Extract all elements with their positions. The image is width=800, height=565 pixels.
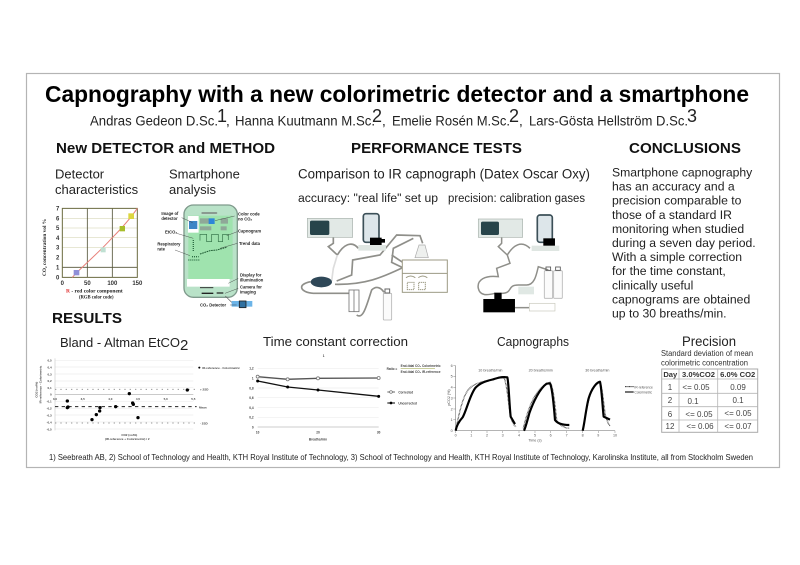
data points: [66, 388, 189, 421]
chart: Bland-Altman: -0,3: [47, 413, 52, 417]
uncorrected line: [256, 379, 380, 398]
chart: Bland-Altman: -0,2: [47, 406, 52, 410]
chart: capnographs: 4: [518, 434, 520, 438]
monitor: [307, 218, 353, 237]
chart: detector calibration curve: 5: [56, 226, 60, 232]
chart: Bland-Altman: -0,5: [47, 427, 52, 431]
chart: capnographs: 2: [451, 407, 453, 411]
label: accuracy setup: accuracy: "real life" set up: [298, 193, 438, 205]
chart: time constant correction: 0: [252, 425, 254, 429]
detector image: [188, 216, 199, 233]
gas cylinders: [544, 267, 562, 298]
callout labels: CO₂ Detector: [200, 302, 226, 307]
label: precision setup: precision: calibration gases: [448, 193, 585, 205]
chart: capnographs: 8: [582, 434, 584, 438]
heading: capnographs: Capnographs: [497, 335, 569, 349]
chart: Bland-Altman: IR-reference - Colorimetric: [39, 365, 43, 403]
chart: detector calibration curve: CO₂ concentration vol %: [42, 219, 48, 276]
chart: time constant correction: 0,4: [249, 406, 254, 410]
chart: time constant correction: 20: [316, 430, 320, 434]
authors: Emelie Rosén M.Sc.: [392, 114, 510, 128]
chart: time constant correction: [249, 354, 441, 442]
chart: Bland-Altman: 0,3: [48, 372, 52, 376]
legend: capnographs: IR-reference: [634, 385, 653, 389]
chart: capnographs: 3: [451, 396, 453, 400]
gas analyser box: [402, 260, 447, 292]
subheading: detector characteristics: characteristics: [55, 182, 139, 197]
callout labels: [157, 211, 264, 307]
callout labels: EtCO₂: [165, 229, 177, 234]
subheading: smartphone analysis: Smartphone: [169, 166, 240, 182]
chart: detector calibration curve: 6: [56, 216, 60, 222]
chart: detector calibration curve: 150: [132, 281, 143, 287]
precision table: <= 0.05: [724, 409, 752, 418]
precision table: 0.09: [730, 383, 746, 392]
chart: detector calibration curve: (RGB color code): [79, 296, 114, 301]
precision table: <= 0.05: [682, 383, 710, 392]
colorimetric traces: [456, 377, 610, 431]
chart: Bland-Altman: 3,5: [81, 397, 85, 401]
legend: Uncorrected: [398, 401, 417, 405]
chart: detector calibration curve: 50: [84, 281, 91, 287]
callout labels: illumination: [240, 277, 264, 282]
chart: detector calibration curve: [42, 206, 143, 301]
heading: performance tests: PERFORMANCE TESTS: [351, 141, 522, 157]
chart: capnographs: 3: [502, 434, 504, 438]
chart: Bland-Altman: 4,5: [136, 397, 140, 401]
EtCO2 and respiratory bars: [188, 240, 199, 260]
IR reference traces: [456, 377, 610, 431]
precision table: Day: [663, 370, 678, 379]
chart: Bland-Altman: 4,0: [108, 397, 113, 401]
chart: capnographs: 5: [451, 375, 453, 379]
colour code box: [200, 218, 228, 230]
chart: Bland-Altman: CO2 (vol%): [35, 382, 39, 398]
authors: Hanna Kuutmann M.Sc.: [235, 114, 375, 128]
chart: Bland-Altman: 0,1: [48, 386, 52, 390]
poster frame: [26, 74, 780, 468]
chart: Bland-Altman: -0,1: [47, 400, 52, 404]
diagram: calibration gases set up: [478, 215, 562, 312]
chart: Bland-Altman: 5,5: [191, 397, 196, 401]
callout labels: rate: [157, 247, 166, 252]
conclusions text: precision comparable to: [612, 194, 742, 208]
black chamber: [483, 293, 515, 312]
pointer lines: [175, 216, 238, 305]
colour square: yellow: [128, 213, 134, 219]
chart: capnographs: 4: [451, 386, 453, 390]
chart: capnographs: Time (s): [528, 439, 542, 443]
chart: time constant correction: 30: [377, 430, 381, 434]
legend: capnographs: Colorimetric: [634, 391, 652, 395]
callout labels: no CO₂: [238, 216, 252, 221]
conclusions text: With a simple correction: [612, 250, 742, 264]
chart: detector calibration curve: 4: [56, 236, 60, 242]
CO2 detector: [225, 296, 252, 308]
diagram: real life set up: [302, 214, 447, 320]
precision table: 1: [668, 383, 673, 392]
colour square: yellow-green: [120, 226, 125, 231]
conclusions text: up to 30 breaths/min.: [612, 306, 726, 320]
callout labels: Trend data: [239, 241, 261, 246]
conclusions text: has an accuracy and a: [612, 180, 735, 194]
chart: capnographs: pCO2 (%): [447, 389, 451, 406]
chart: Bland-Altman: 5,0: [164, 397, 168, 401]
chart: capnographs: 9: [597, 434, 599, 438]
capnogram trace: [200, 234, 228, 242]
chart: time constant correction: 10: [256, 430, 260, 434]
chart: detector calibration curve: 0: [61, 281, 65, 287]
authors: [90, 106, 697, 128]
trend trace: [200, 247, 227, 254]
chart: Bland-Altman: 0,5: [48, 358, 52, 362]
precision table: 6.0% CO2: [720, 370, 755, 379]
chart: Bland-Altman: CO2 (vol%): [121, 433, 137, 437]
precision table: <= 0.06: [686, 422, 714, 431]
precision table: 2: [668, 396, 673, 405]
legend: [387, 364, 441, 405]
callout labels: imaging: [240, 290, 256, 295]
chart: Bland-Altman: 0,2: [48, 379, 52, 383]
small meter: [518, 287, 534, 294]
conclusions text: for the time constant,: [612, 264, 726, 278]
chart: time constant correction: 1: [252, 377, 254, 381]
authors: ,: [519, 114, 523, 128]
precision table: 12: [666, 422, 675, 431]
precision table: <= 0.07: [724, 422, 752, 431]
smartphone with clip: [358, 214, 386, 251]
legend: End-tidal CO₂ Colorimetric: [401, 364, 441, 368]
callout labels: Camera for: [240, 284, 262, 289]
chart: Bland-Altman: + 2SD: [200, 388, 209, 392]
table caption: Standard deviation of mean: [661, 349, 753, 358]
chart: Bland-Altman: (IR-reference + Colorimetric) / 2: [105, 437, 150, 441]
precision table: <= 0.05: [685, 410, 713, 419]
colour square: pale green: [101, 247, 106, 252]
chart: capnographs: 1: [451, 418, 453, 422]
recorder: [529, 303, 555, 311]
precision table: [662, 369, 758, 432]
phone display: [188, 216, 233, 279]
heading: time constant correction: Time constant correction: [263, 335, 408, 349]
chart: time constant correction: 0,8: [249, 386, 254, 390]
phone body: [184, 205, 237, 297]
chart: detector calibration curve: 7: [56, 206, 60, 212]
chart: Bland-Altman: Mean: [199, 405, 207, 409]
heading: new detector and method: New DETECTOR and METHOD: [56, 141, 275, 157]
chart: Bland-Altman: 0: [50, 393, 52, 397]
chart: Bland-Altman: -0,4: [47, 420, 52, 424]
chart: capnographs: 6: [451, 364, 453, 368]
precision table: 0.1: [687, 397, 699, 406]
callout labels: detector: [161, 216, 178, 221]
conclusions text: those of a standard IR: [612, 208, 732, 222]
chart: time constant correction: 1,2: [249, 367, 254, 371]
chart: capnographs: 7: [566, 434, 568, 438]
chart: detector calibration curve: 0: [56, 275, 60, 281]
chart: capnographs: 0: [455, 434, 457, 438]
smartphone analysis diagram: [157, 205, 264, 308]
smartphone with clip: [532, 215, 559, 251]
chart: time constant correction: Breaths/min: [309, 438, 327, 442]
precision table: 3.0%CO2: [682, 370, 715, 379]
chart: detector calibration curve: 100: [107, 281, 118, 287]
chart: detector calibration curve: 1: [56, 265, 60, 271]
chart: capnographs: [447, 364, 617, 443]
chart: time constant correction: 1: [323, 354, 325, 358]
chart: capnographs: 2: [486, 434, 488, 438]
monitor: [478, 219, 523, 237]
chart: capnographs: 5: [534, 434, 536, 438]
callout labels: Respiratory: [157, 242, 181, 247]
chart: capnographs: 10: [613, 434, 617, 438]
chart: time constant correction: 0,6: [249, 396, 254, 400]
precision table: 0.1: [732, 396, 744, 405]
legend: Corrected: [398, 390, 413, 394]
heading: results: RESULTS: [52, 311, 122, 327]
corrected line: [256, 375, 380, 381]
chart: capnographs: 10 breaths/min: [478, 369, 502, 373]
precision table: 6: [668, 410, 673, 419]
chart: Bland-Altman: 0,4: [48, 365, 52, 369]
authors: Andras Gedeon D.Sc.: [90, 114, 218, 128]
subheading: comparison: Comparison to IR capnograph (Datex Oscar Oxy): [298, 166, 590, 182]
callout labels: Image of: [161, 211, 179, 216]
flow meter: [349, 290, 359, 312]
heading: precision: Precision: [682, 334, 736, 349]
chart: capnographs: 0: [451, 429, 453, 433]
subheading: detector characteristics: Detector: [55, 166, 105, 182]
authors: Lars-Gösta Hellström D.Sc.: [529, 114, 688, 128]
chart: time constant correction: 0,2: [249, 416, 254, 420]
title: Capnography with a new colorimetric detector and a smartphone: [45, 81, 749, 107]
chart: capnographs: 6: [550, 434, 552, 438]
conclusions text: monitoring when studied: [612, 222, 744, 236]
chart: Bland-Altman: [35, 358, 240, 441]
gas cylinder: [383, 289, 392, 320]
flask: [415, 245, 428, 258]
legend: End-tidal CO₂ IR-reference: [401, 370, 441, 374]
callout labels: Capnogram: [238, 229, 261, 234]
callout labels: Display for: [240, 272, 262, 277]
chart: capnographs: 20 breaths/min: [529, 369, 553, 373]
callout labels: Color code: [238, 211, 260, 216]
authors: ,: [226, 114, 230, 128]
heading: Bland-Altman: Bland - Altman EtCO: [60, 335, 180, 350]
legend: Ratio =: [387, 367, 397, 371]
chart: Bland-Altman: IR-reference - Colorimetric: [202, 366, 240, 370]
authors: 2: [509, 106, 519, 126]
chart: detector calibration curve: R - red color component: [66, 289, 123, 295]
heading: Bland-Altman: 2: [180, 337, 188, 354]
chart: Bland-Altman: 3,0: [53, 397, 57, 401]
chart: capnographs: 1: [470, 434, 472, 438]
chart: detector calibration curve: 2: [56, 256, 60, 262]
colour square: purple: [74, 270, 79, 275]
subheading: smartphone analysis: analysis: [169, 182, 216, 197]
conclusions text: capnograms are obtained: [612, 292, 750, 306]
authors: 3: [687, 106, 697, 126]
chart: capnographs: 30 breaths/min: [585, 369, 609, 373]
chart: Bland-Altman: - 2SD: [200, 421, 208, 425]
conclusions text: clinically useful: [612, 278, 693, 292]
authors: 2: [372, 106, 382, 126]
authors: ,: [382, 114, 386, 128]
phone camera: [200, 286, 213, 289]
authors: 1: [217, 106, 227, 126]
patient mask: [311, 277, 332, 287]
conclusions text: Smartphone capnography: [612, 166, 753, 180]
table caption: colorimetric concentration: [661, 358, 748, 368]
heading: conclusions: CONCLUSIONS: [629, 141, 741, 157]
chart: detector calibration curve: 3: [56, 246, 60, 252]
legend: capnographs: [625, 385, 653, 395]
conclusions text: during a seven day period.: [612, 236, 756, 250]
